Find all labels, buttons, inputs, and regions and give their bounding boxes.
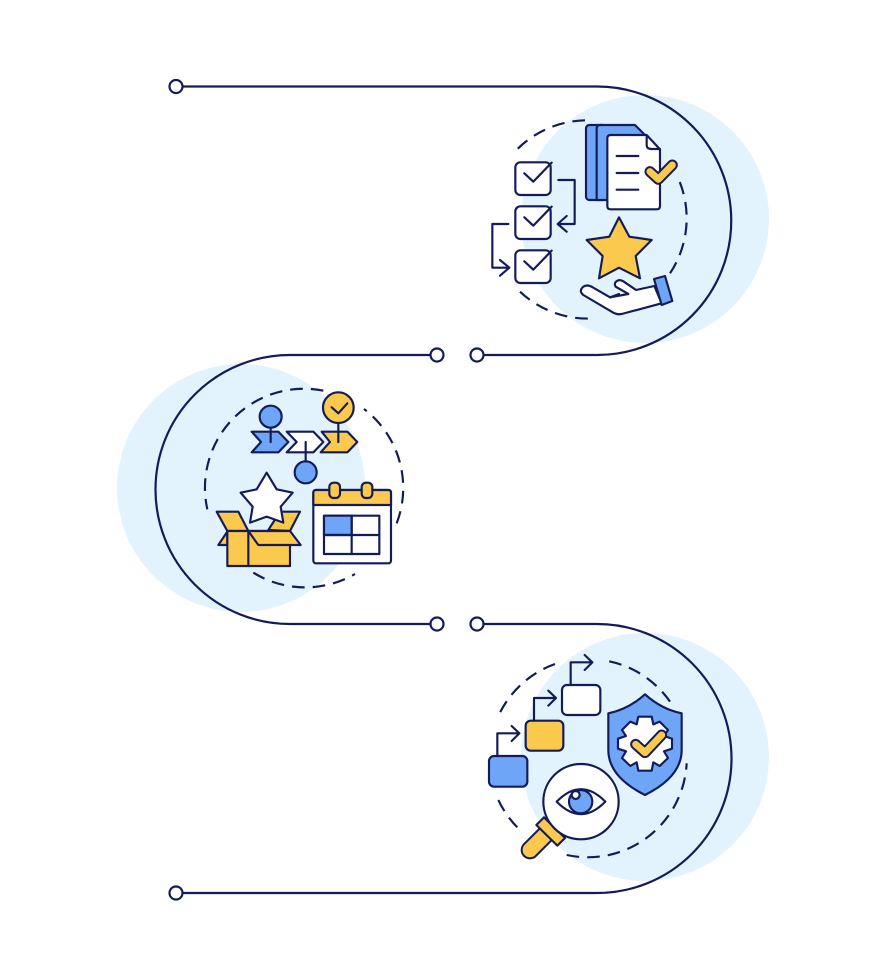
connector: top track	[170, 80, 731, 362]
icon: steps, security shield and magnifier with eye	[489, 655, 687, 857]
blob: step 3 background	[521, 633, 769, 881]
blob: step 1 background	[521, 95, 769, 343]
connector: middle track	[156, 348, 444, 630]
connector: bottom track	[170, 618, 732, 900]
icon: workflow chevrons, gift box and calendar	[205, 389, 403, 587]
blob: step 2 background	[117, 364, 365, 612]
icon: documents, checklist, star in hand	[492, 120, 687, 319]
